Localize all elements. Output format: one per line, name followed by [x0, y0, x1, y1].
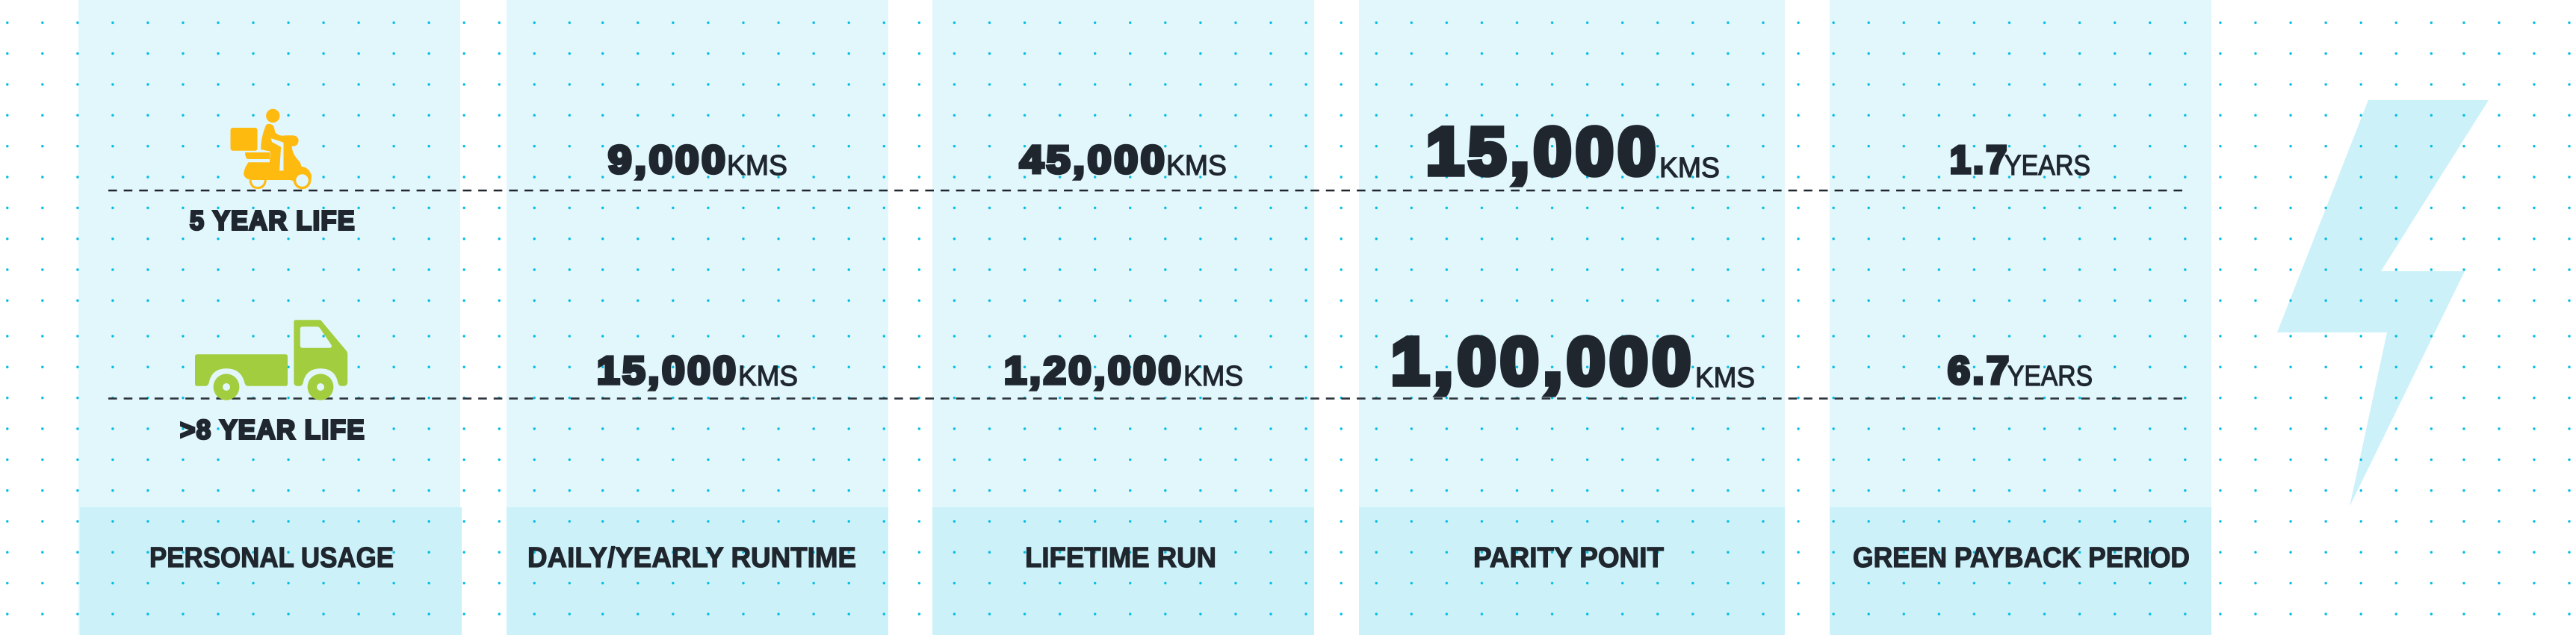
label: 5 year life: 5 YEAR LIFE	[190, 205, 356, 236]
value: 9,000 kms: KMS	[727, 150, 787, 182]
value: parity 1,00,000 kms: 1,00,000	[1391, 323, 1695, 398]
value: 9,000 kms	[608, 139, 787, 182]
value: 45,000 kms	[1020, 139, 1227, 182]
value: parity 1,00,000 kms: KMS	[1695, 362, 1755, 394]
panel: parity point column	[1359, 0, 1785, 635]
value: 1.7 years: YEARS	[2004, 150, 2090, 182]
value: 1,20,000 kms: 1,20,000	[1004, 350, 1183, 393]
heading: personal usage: PERSONAL USAGE	[149, 542, 394, 574]
icon: pickup truck	[195, 320, 347, 400]
value: 6.7 years: YEARS	[2007, 361, 2093, 392]
heading: lifetime run: LIFETIME RUN	[1025, 542, 1216, 574]
icon: lightning bolt	[2277, 100, 2489, 507]
value: parity 15,000 kms: KMS	[1659, 152, 1720, 184]
value: 1.7 years: 1.7	[1950, 139, 2010, 182]
heading: daily/yearly runtime: DAILY/YEARLY RUNTIME	[527, 542, 856, 574]
value: 1,20,000 kms: KMS	[1183, 361, 1243, 392]
label: greater than 8 year life: >8 YEAR LIFE	[180, 414, 365, 445]
panel: lifetime run column	[932, 0, 1314, 635]
heading: parity ponit: PARITY PONIT	[1473, 542, 1664, 574]
value: 6.7 years: 6.7	[1948, 350, 2011, 393]
value: parity 15,000 kms: 15,000	[1426, 114, 1660, 188]
value: 45,000 kms: 45,000	[1020, 139, 1167, 182]
value: 6.7 years	[1948, 350, 2093, 393]
panel: daily/yearly runtime column	[507, 0, 888, 635]
heading: green payback period: GREEN PAYBACK PERIOD	[1853, 542, 2190, 574]
value: 45,000 kms: KMS	[1166, 150, 1227, 182]
icon: delivery scooter	[230, 109, 312, 188]
value: 1.7 years	[1950, 139, 2090, 182]
panel: green payback period column	[1830, 0, 2211, 635]
value: 9,000 kms: 9,000	[608, 139, 728, 182]
value: 15,000 kms	[597, 350, 798, 393]
panel: personal usage column	[78, 0, 462, 635]
value: 15,000 kms: 15,000	[597, 350, 738, 393]
value: 15,000 kms: KMS	[738, 361, 798, 392]
